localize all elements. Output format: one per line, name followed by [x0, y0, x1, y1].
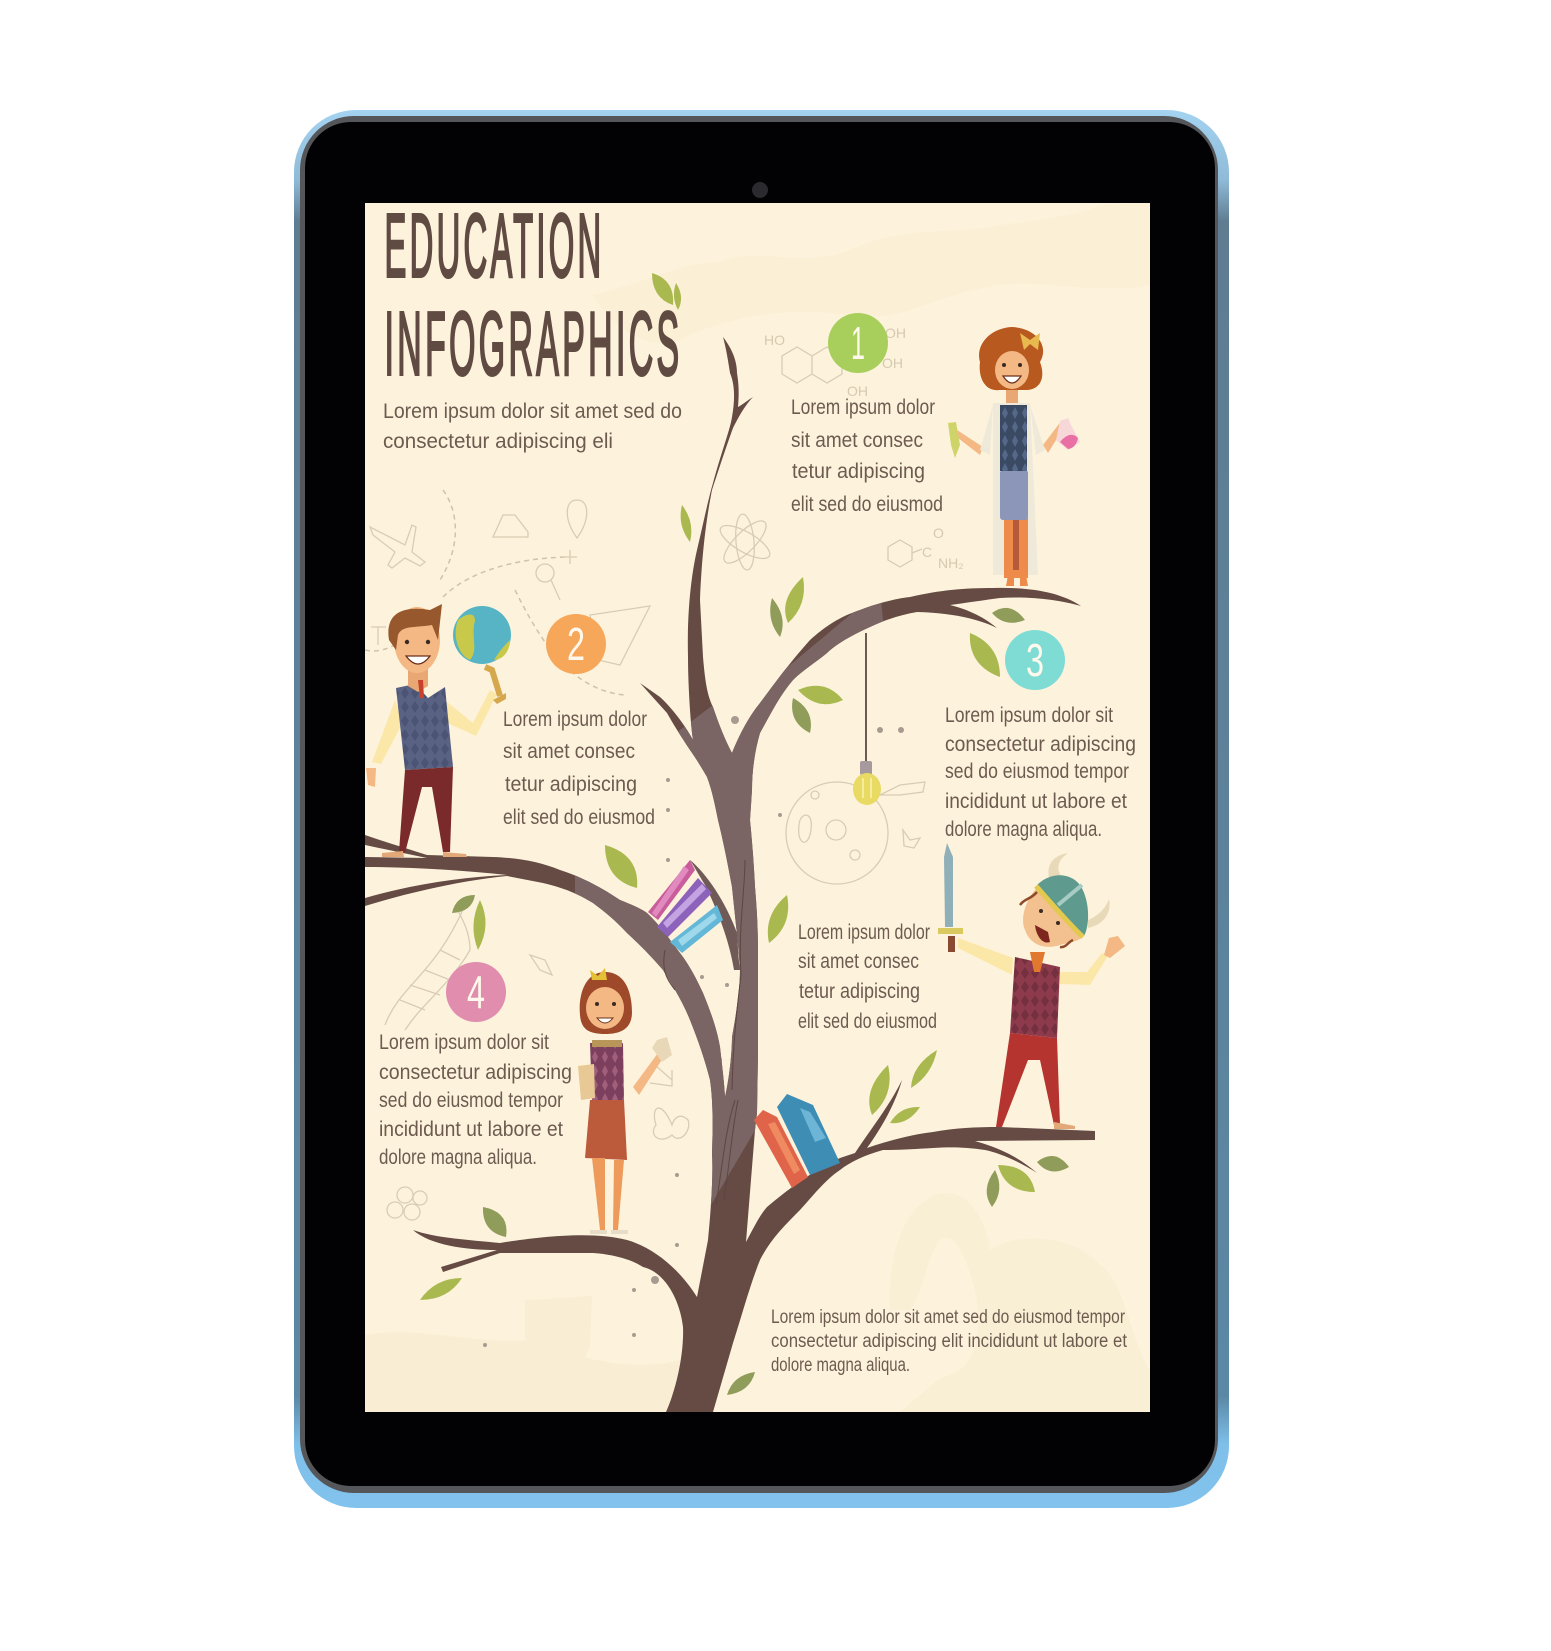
doodle: molecule formula: C: [922, 544, 932, 560]
text block middle: tetur adipiscing: [799, 980, 920, 1003]
text block middle: sit amet consec: [798, 950, 919, 973]
doodle: DNA: [385, 905, 470, 1030]
text block middle: Lorem ipsum dolor: [798, 921, 930, 944]
intro text: consectetur adipiscing eli: [383, 430, 613, 453]
number badge 1: 1: [851, 317, 865, 369]
doodle: molecule formula: OH: [882, 355, 903, 371]
character: scientist woman: [948, 327, 1080, 586]
doodle: atom: [720, 514, 770, 570]
number badge 3: [1005, 630, 1065, 690]
number badge 2: 2: [567, 618, 585, 670]
doodle: molecule formula: OH: [847, 383, 868, 399]
background blotches: [365, 1296, 680, 1412]
text block 4: [379, 1031, 572, 1169]
doodle: molecule formula: HO: [764, 332, 785, 348]
text block 4: sed do eiusmod tempor: [379, 1089, 563, 1112]
text block 3: dolore magna aliqua.: [945, 818, 1102, 841]
text block 4: consectetur adipiscing: [379, 1061, 572, 1084]
doodle: molecule formula: [764, 325, 964, 571]
text block 3: Lorem ipsum dolor sit: [945, 704, 1113, 727]
text block bottom: Lorem ipsum dolor sit amet sed do eiusmod tempor: [771, 1307, 1126, 1328]
icon: webcam: [752, 182, 768, 198]
text block bottom: dolore magna aliqua.: [771, 1355, 910, 1376]
text block 3: incididunt ut labore et: [945, 790, 1127, 813]
character: teacher with globe: [366, 604, 511, 857]
text block middle: [798, 921, 937, 1033]
text block 3: sed do eiusmod tempor: [945, 760, 1129, 783]
tree: [365, 337, 1095, 1412]
panel: screen infographic: EDUCATION: [384, 196, 604, 296]
icon: light bulb: [853, 633, 881, 805]
text block 3: consectetur adipiscing: [945, 733, 1136, 756]
panel: screen infographic: INFOGRAPHICS: [384, 294, 682, 394]
text block 2: tetur adipiscing: [505, 773, 637, 796]
tablet frame: [294, 110, 1229, 1508]
text block 4: dolore magna aliqua.: [379, 1146, 537, 1169]
text block middle: elit sed do eiusmod: [798, 1010, 937, 1033]
intro text: Lorem ipsum dolor sit amet sed do: [383, 400, 682, 423]
scattered dots: [483, 716, 904, 1347]
number badge 1: [828, 313, 888, 373]
text block 2: sit amet consec: [503, 740, 635, 763]
number badge 4: 4: [467, 966, 485, 1018]
text block 2: [503, 708, 655, 829]
doodles: travel: [365, 490, 650, 695]
text block 2: Lorem ipsum dolor: [503, 708, 647, 731]
number badge 3: 3: [1026, 634, 1044, 686]
text block 1: elit sed do eiusmod: [791, 493, 943, 516]
text block 1: tetur adipiscing: [792, 460, 925, 483]
doodle: moon and rocket: [786, 782, 925, 884]
text block 1: Lorem ipsum dolor: [791, 396, 935, 419]
text block 3: [945, 704, 1136, 841]
character: girl with books: [578, 968, 672, 1234]
doodle: molecule formula: O: [933, 525, 944, 541]
text block bottom: consectetur adipiscing elit incididunt ut labore et: [771, 1331, 1128, 1352]
books: upper pile: [648, 860, 723, 953]
leaves: [420, 273, 1069, 1395]
intro text: [383, 400, 682, 453]
number badge 4: [446, 962, 506, 1022]
text block bottom: [771, 1307, 1128, 1376]
text block 4: incididunt ut labore et: [379, 1118, 563, 1141]
books: lower pile: [754, 1094, 840, 1188]
text block 1: [791, 396, 943, 516]
doodle: molecule formula: OH: [885, 325, 906, 341]
doodle: molecule formula: NH₂: [938, 555, 964, 571]
doodles: rocket, butterfly, flowers, microscope: [387, 955, 689, 1220]
title: [386, 212, 678, 377]
text block 4: Lorem ipsum dolor sit: [379, 1031, 549, 1054]
text block 2: elit sed do eiusmod: [503, 806, 655, 829]
panel: screen infographic: [365, 196, 1150, 1412]
character: viking boy: [938, 843, 1125, 1129]
number badge 2: [546, 614, 606, 674]
text block 1: sit amet consec: [791, 429, 923, 452]
